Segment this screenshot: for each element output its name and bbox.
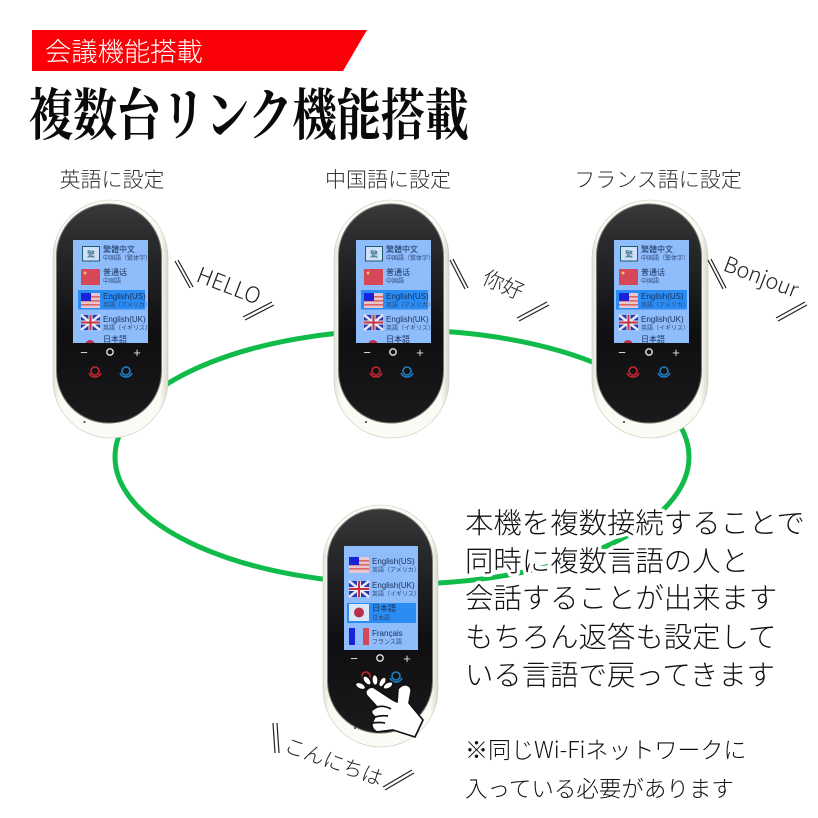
screen: 中国語 [386, 277, 404, 285]
device: French: + [672, 345, 680, 360]
screen: English(US) [641, 292, 684, 301]
device: Japanese (bottom) [323, 505, 438, 747]
device: Japanese (bottom): + [403, 651, 411, 666]
screen: English(US) [103, 292, 146, 301]
controls: − [618, 345, 626, 360]
device: English [53, 200, 168, 438]
device: Chinese: + [416, 345, 424, 360]
screen: English(UK) [372, 581, 415, 590]
mic buttons [89, 367, 132, 377]
speech: Bonjour: Bonjour [719, 248, 804, 305]
screen [73, 240, 151, 350]
note text: ※同じWi-Fiネットワークに [465, 731, 746, 765]
screen [344, 546, 420, 650]
speech: HELLO [175, 258, 274, 320]
speech lines [450, 259, 549, 321]
screen: 英語（イギリス） [372, 590, 420, 598]
screen: 英語（アメリカ） [103, 301, 151, 309]
speech: 你好: 你好 [478, 262, 529, 306]
note text: 入っている必要があります [465, 772, 734, 804]
screen: 普通话 [386, 267, 410, 277]
device: French [592, 200, 708, 438]
screen: 中国語（繁体字） [386, 254, 434, 262]
screen: Français [372, 629, 403, 638]
controls: − [363, 345, 371, 360]
screen [614, 240, 689, 350]
screen: 繁體中文 [386, 244, 418, 254]
screen: 日本語 [372, 614, 390, 622]
screen: 英語（アメリカ） [641, 301, 689, 309]
speech: 你好 [450, 259, 549, 321]
note text [465, 731, 746, 804]
label: English: 英語に設定 [60, 164, 164, 194]
device: Chinese [334, 200, 449, 438]
screen: 英語（イギリス） [386, 324, 434, 332]
mic buttons [627, 367, 670, 377]
description text: もちろん返答も設定して [465, 615, 776, 656]
icon: tapping hand [354, 674, 423, 737]
speech: こんにちは [273, 723, 414, 792]
label: French: フランス語に設定 [574, 164, 742, 194]
description text [465, 501, 805, 694]
controls: − [80, 345, 88, 360]
screen: 英語（イギリス） [103, 324, 151, 332]
screen: 繁體中文 [103, 244, 135, 254]
speech: Bonjour [708, 248, 807, 321]
description text: 会話することが出来ます [465, 576, 777, 617]
controls: − [350, 651, 358, 666]
screen: 繁體中文 [641, 244, 673, 254]
screen: English(US) [386, 292, 429, 301]
speech lines [175, 260, 274, 320]
screen: 繁 [87, 249, 95, 259]
green connection ring [115, 330, 689, 584]
tag banner [32, 30, 367, 71]
speech: HELLO: HELLO [192, 258, 266, 311]
screen: 中国語 [103, 277, 121, 285]
screen: 中国語（繁体字） [641, 254, 689, 262]
screen: English(UK) [103, 315, 146, 324]
tag banner: 会議機能搭載 [45, 30, 203, 69]
speech lines [708, 259, 807, 321]
screen: English(US) [372, 557, 415, 566]
screen [356, 240, 434, 350]
mic buttons [370, 367, 413, 377]
screen: 普通话 [103, 267, 127, 277]
tap marks [354, 674, 394, 691]
screen: 英語（イギリス） [641, 324, 689, 332]
screen: 英語（アメリカ） [372, 566, 420, 574]
screen: 日本語 [372, 603, 396, 613]
screen: English(UK) [386, 315, 429, 324]
screen: 繁 [370, 249, 378, 259]
speech: こんにちは: こんにちは [281, 728, 388, 792]
screen: English(UK) [641, 315, 684, 324]
description text: いる言語で戻ってきます [465, 653, 775, 694]
screen: 繁 [625, 249, 633, 259]
screen: 中国語（繁体字） [103, 254, 151, 262]
screen: 日本語 [641, 334, 665, 344]
speech lines [273, 723, 414, 790]
screen: 日本語 [386, 334, 410, 344]
description text: 同時に複数言語の人と [465, 539, 749, 580]
screen: フランス語 [372, 639, 402, 646]
screen: 中国語 [641, 277, 659, 285]
device: English: + [133, 345, 141, 360]
mic buttons [362, 672, 402, 682]
screen: 日本語 [103, 334, 127, 344]
title: 複数台リンク機能搭載 [29, 72, 469, 152]
screen: 普通话 [641, 267, 665, 277]
screen: 英語（アメリカ） [386, 301, 434, 309]
label: Chinese: 中国語に設定 [325, 164, 451, 194]
description text: 本機を複数接続することで [465, 501, 805, 542]
